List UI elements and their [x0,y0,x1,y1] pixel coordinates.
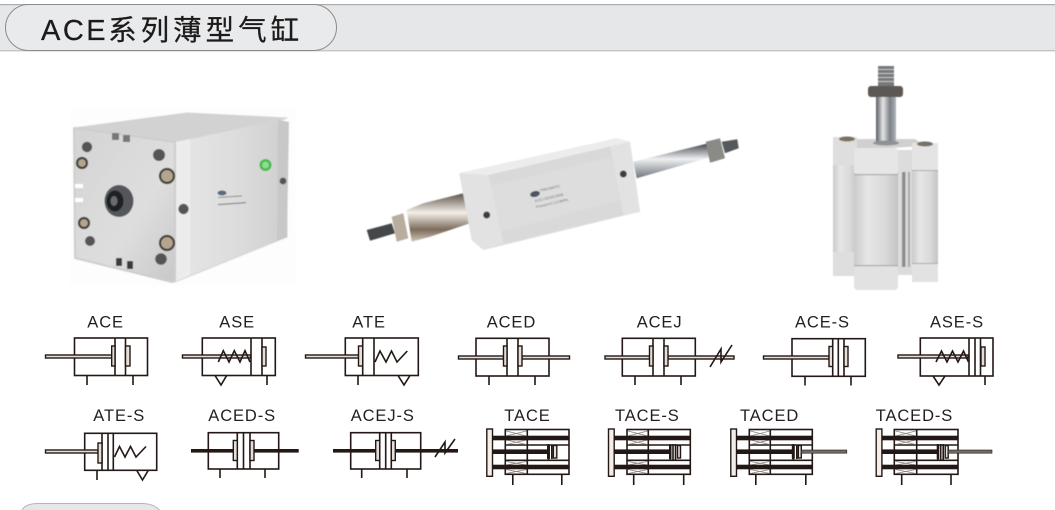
symbol TACE: TACE [504,407,551,425]
body behind blocks [850,160,920,272]
symbol ACEJ: ACEJ [637,314,682,332]
symbol TACED-S: TACED-S [876,407,953,425]
header bar [0,4,1055,51]
top recess [845,139,925,150]
symbol TACED: TACED [740,407,799,425]
symbol ACE [46,314,148,385]
symbol ASE-S: ASE-S [930,314,984,332]
symbol ACEJ-S: ACEJ-S [351,407,415,425]
photo: compact square cylinder [70,108,296,286]
symbol ACED [458,314,570,385]
symbol ASE: ASE [219,314,255,332]
symbol ACEJ [605,314,734,385]
rear-left block [833,136,857,276]
slots [112,133,130,142]
logo [218,190,226,196]
product marking [529,183,569,210]
symbol ATE [306,314,418,385]
symbol TACE-S [608,407,690,485]
symbol ATE: ATE [352,314,386,332]
symbol ACED-S [191,407,299,478]
product marking: Pressure:0.1-0.8MPa [536,198,569,209]
symbol ACE-S: ACE-S [795,314,850,332]
title pill [6,4,336,50]
brass screws [77,158,174,250]
photo: double-rod cylinder [367,138,739,250]
symbol ACEJ-S [333,407,458,478]
mounting holes [82,142,286,265]
symbol ATE-S: ATE-S [93,407,145,425]
symbol ASE [182,314,275,385]
right block [912,142,938,282]
symbol TACE-S: TACE-S [615,407,680,425]
symbol ACE: ACE [87,314,124,332]
right groove [898,150,912,275]
title: ACE系列薄型气缸 [41,8,303,49]
symbols row 1 [46,314,993,386]
rod port [104,185,134,217]
symbol TACED [731,407,847,485]
symbol TACED-S [876,407,992,485]
product marking: PNEUMATIC [540,184,561,193]
symbol ASE-S [898,314,993,385]
front block [854,148,898,290]
symbol ACED-S: ACED-S [208,407,276,425]
product marking: ACEJ 25X50-200B [534,193,564,203]
symbol ACED: ACED [487,314,536,332]
symbol ACE-S [764,314,865,386]
symbols row 2 [46,407,992,485]
next section tab [20,504,160,510]
symbol ATE-S [46,407,157,480]
photo: upright cylinder [833,66,938,290]
green sticker [260,159,272,171]
symbol TACE [487,407,569,485]
